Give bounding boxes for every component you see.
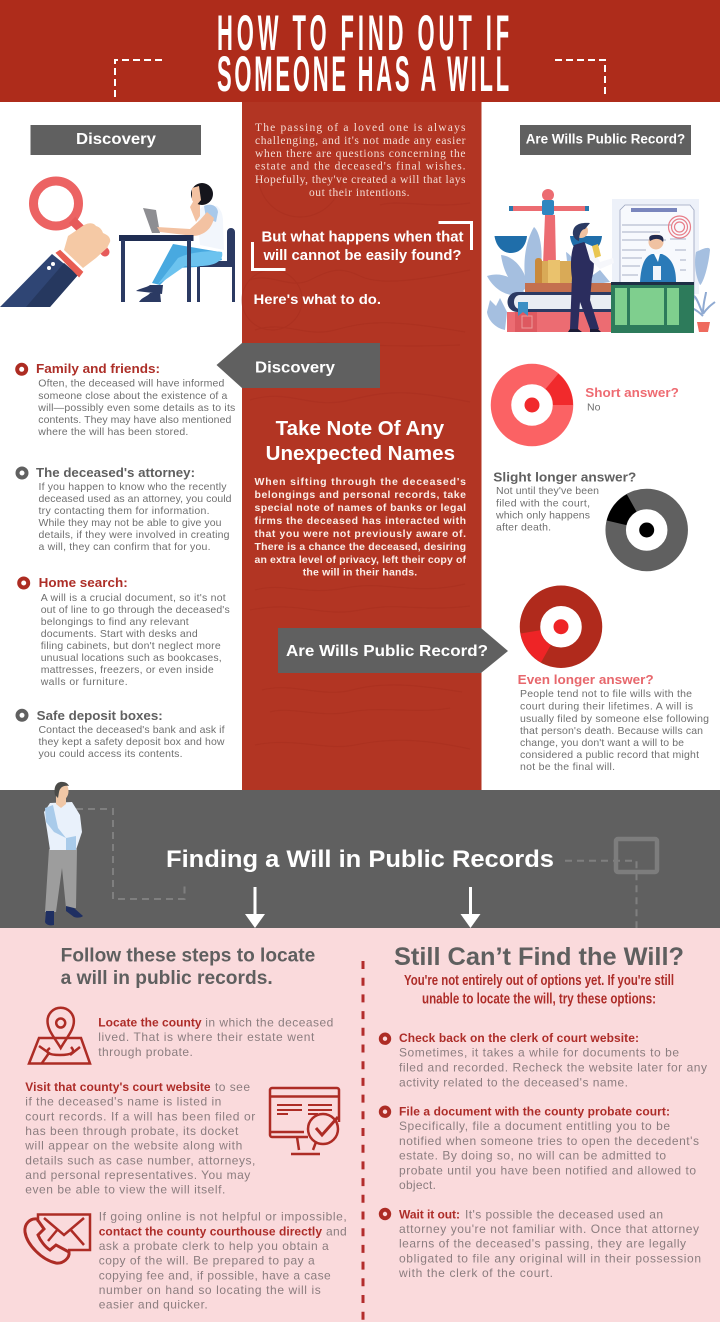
item: home search: Home search: xyxy=(39,575,128,590)
text: contact courthouse: number on hand so locating the will is xyxy=(99,1283,321,1297)
text: contact courthouse xyxy=(99,1210,347,1312)
short answer text: No xyxy=(587,402,601,414)
item: check back: activity related to the deceased's name. xyxy=(399,1075,628,1089)
text: visit county website: and personal representatives. You may xyxy=(25,1168,250,1182)
short answer text: Short answer? xyxy=(585,385,679,400)
item: wait it out: obligated to file any original will in their possession xyxy=(399,1251,701,1265)
slight longer answer text: which only happens xyxy=(495,510,590,522)
even longer answer text: not be the final will. xyxy=(520,761,615,773)
item: family and friends: Family and friends: xyxy=(36,361,160,376)
text: visit county website: details such as case number, attorneys, xyxy=(25,1153,255,1167)
item: attorney: details, if they were involved in creating xyxy=(38,529,230,541)
intro text: when there are questions concerning the xyxy=(255,148,466,160)
item: family and friends: will—possibly even some details as to its xyxy=(37,402,235,414)
item: home search: A will is a crucial document, so it's not xyxy=(41,592,226,604)
text block: take note: special note of names of banks or legal xyxy=(254,502,466,514)
item: home search: mattresses, freezers, or even inside xyxy=(41,664,214,676)
intro text: The passing of a loved one is always xyxy=(255,122,466,134)
item: safe deposit boxes xyxy=(18,708,225,760)
item: wait it out: with the clerk of the court. xyxy=(398,1266,553,1280)
item: attorney: The deceased's attorney: xyxy=(36,465,195,480)
label: are wills public record top xyxy=(520,125,691,155)
item: safe deposit boxes: you could access its contents. xyxy=(38,748,182,760)
item: family and friends: Often, the deceased will have informed xyxy=(38,378,224,390)
even longer answer text: usually filed by someone else following xyxy=(520,713,709,725)
item: home search: unusual locations such as bookcases, xyxy=(41,652,222,664)
text: contact courthouse: If going online is not helpful or impossible, xyxy=(99,1210,347,1224)
item: wait it out: It's possible the deceased used an xyxy=(465,1207,663,1221)
panel: title banner xyxy=(0,0,720,103)
text block: take note: When sifting through the deceased's xyxy=(254,476,466,488)
even longer answer text: considered a public record that might xyxy=(520,749,699,761)
dashed connector right xyxy=(565,861,636,928)
label: discovery top: Discovery xyxy=(76,131,156,148)
even longer answer text: People tend not to file wills with the xyxy=(520,688,692,700)
title: SOMEONE HAS A WILL xyxy=(217,47,509,103)
item: home search: documents. Start with desks and xyxy=(41,628,198,640)
item: home search xyxy=(19,575,230,688)
dashed corner right xyxy=(555,60,605,97)
item: family and friends xyxy=(17,361,235,438)
item: home search: belongings to find any relevant xyxy=(41,616,189,628)
illustration: legal scene xyxy=(487,189,715,333)
panel: finding a will band xyxy=(0,782,720,928)
text: locate the county: Locate the county xyxy=(98,1016,202,1030)
intro text: estate and the deceased's final wishes. xyxy=(255,160,466,172)
heading: take note: Unexpected Names xyxy=(266,443,455,465)
text: visit county website: will appear on the website along with xyxy=(24,1139,242,1153)
text: contact courthouse: contact the county courthouse directly xyxy=(99,1224,322,1238)
item: family and friends: someone close about the existence of a xyxy=(38,390,227,402)
item: wait it out: learns of the deceased's passing, they are legally xyxy=(399,1237,686,1251)
intro text: challenging, and it's not made any easier xyxy=(255,135,466,147)
arrow: right xyxy=(460,887,480,928)
subheading: options xyxy=(404,973,674,1007)
item: attorney: deceased used as an attorney, you could xyxy=(38,493,232,505)
item: safe deposit boxes: Safe deposit boxes: xyxy=(37,708,163,723)
heading: follow these steps: a will in public records. xyxy=(61,968,273,989)
item: attorney: While they may not be able to give you xyxy=(38,517,222,529)
title xyxy=(217,6,509,103)
callout: but what happens: will cannot be easily found? xyxy=(263,247,462,264)
even longer answer text: Even longer answer? xyxy=(518,672,654,687)
slight longer answer text: filed with the court, xyxy=(496,498,590,510)
heading: here's what to do: Here's what to do. xyxy=(254,292,381,307)
arrow label: discovery: Discovery xyxy=(255,360,335,377)
donut chart: short answer xyxy=(501,374,573,436)
even longer answer text: that person's death. Because wills can xyxy=(520,725,703,737)
item: home search: walls or furniture. xyxy=(40,676,128,688)
item: attorney: try contacting them for information. xyxy=(38,505,210,517)
text: locate the county: lived. That is where their estate went xyxy=(98,1030,315,1044)
panel: public record answers xyxy=(493,374,709,773)
text: locate the county: in which the deceased xyxy=(205,1016,333,1030)
arrow: left xyxy=(245,887,265,928)
text block: take note: There is a chance the deceased, desiring xyxy=(254,541,466,553)
short answer text xyxy=(585,385,679,414)
intro text: out their intentions. xyxy=(309,187,410,199)
callout: but what happens xyxy=(252,222,472,270)
text: contact courthouse: and xyxy=(326,1224,347,1238)
heading: still can't find the will: Still Can’t Find the Will? xyxy=(394,943,684,971)
text: visit county website: to see xyxy=(215,1080,250,1094)
item: home search: filing cabinets, but don't neglect more xyxy=(41,640,221,652)
item: family and friends: where the will has been stored. xyxy=(37,426,188,438)
text: visit county website: has been through probate, its docket xyxy=(25,1124,239,1138)
item: check back xyxy=(381,1031,707,1089)
even longer answer text xyxy=(518,672,709,773)
text: visit county website xyxy=(24,1080,255,1197)
arrow label: are wills public record xyxy=(278,628,508,673)
item: wait it out: attorney you're not familiar with. Once that attorney xyxy=(399,1222,699,1236)
slight longer answer text: Not until they've been xyxy=(496,485,599,497)
heading: finding a will: Finding a Will in Public Records xyxy=(166,846,554,873)
item: attorney xyxy=(18,465,232,553)
text: visit county website: Visit that county's court website xyxy=(25,1080,211,1094)
icon: monitor with check xyxy=(270,1088,339,1154)
illustration: standing man xyxy=(44,782,83,925)
item: family and friends: contents. They may have also mentioned xyxy=(38,414,231,426)
text block: take note xyxy=(254,476,466,579)
item: file a document: estate. By doing so, no will can be admitted to xyxy=(399,1149,666,1163)
text block: take note: the will in their hands. xyxy=(303,567,417,579)
text: visit county website: even be able to view the will itself. xyxy=(25,1183,225,1197)
text: contact courthouse: copy of the will. Be prepared to pay a xyxy=(99,1254,315,1268)
item: safe deposit boxes: Contact the deceased's bank and ask if xyxy=(38,724,225,736)
dashed connector left xyxy=(76,809,184,899)
item: check back: Sometimes, it takes a while for documents to be xyxy=(399,1046,679,1060)
intro text: Hopefully, they've created a will that lays xyxy=(255,174,466,186)
icon: map pin xyxy=(29,1008,90,1064)
illustration: hand with magnifying glass xyxy=(0,181,110,307)
text block: take note: an extra level of privacy, left their copy of xyxy=(254,554,466,566)
panel: centre column xyxy=(242,102,482,790)
label: are wills public record top: Are Wills Public Record? xyxy=(526,132,685,146)
label: discovery top xyxy=(30,125,201,155)
item: check back: filed and recorded. Recheck the website later for any xyxy=(399,1061,707,1075)
panel: pink section xyxy=(0,928,720,1322)
illustration: woman at desk xyxy=(119,183,235,302)
donut chart: slight longer answer xyxy=(607,494,678,561)
heading: take note xyxy=(266,418,455,465)
arrow label: are wills public record: Are Wills Public Record? xyxy=(286,643,488,660)
subheading: options: unable to locate the will, try these options: xyxy=(422,991,656,1007)
item: safe deposit boxes: they kept a safety deposit box and how xyxy=(38,736,225,748)
heading: follow these steps xyxy=(61,946,315,989)
item: file a document: object. xyxy=(399,1178,436,1192)
heading: take note: Take Note Of Any xyxy=(276,418,445,440)
item: file a document: Specifically, file a document entitling you to be xyxy=(399,1119,670,1133)
item: check back: Check back on the clerk of court website: xyxy=(399,1031,639,1045)
text block: take note: firms the deceased has interacted with xyxy=(254,515,466,527)
text: visit county website: if the deceased's name is listed in xyxy=(25,1095,221,1109)
item: wait it out: Wait it out: xyxy=(399,1207,460,1221)
icon: square outline xyxy=(616,839,657,872)
title: HOW TO FIND OUT IF xyxy=(217,6,509,62)
item: file a document: notified when someone tries to open the decedent's xyxy=(399,1134,699,1148)
text block: take note: that you were not previously aware of. xyxy=(254,528,466,540)
slight longer answer text: after death. xyxy=(496,522,551,534)
item: file a document xyxy=(381,1104,699,1192)
heading: follow these steps: Follow these steps to locate xyxy=(61,946,315,967)
list: discovery methods xyxy=(17,361,235,760)
slight longer answer text: Slight longer answer? xyxy=(493,470,636,485)
dashed corner left xyxy=(115,60,165,97)
dashed divider xyxy=(362,961,364,1322)
text: contact courthouse: copying fee and, if possible, have a case xyxy=(99,1268,331,1282)
text block: take note: belongings and personal records, take xyxy=(254,489,466,501)
item: home search: out of line to go through the deceased's xyxy=(41,604,230,616)
even longer answer text: court during their lifetimes. A will is xyxy=(520,701,693,713)
intro text xyxy=(255,122,466,199)
slight longer answer text xyxy=(493,470,636,534)
even longer answer text: change, you don't want a will to be xyxy=(520,737,684,749)
item: file a document: probate until you have been notified and allowed to xyxy=(399,1163,696,1177)
text: contact courthouse: ask a probate clerk to help you obtain a xyxy=(99,1239,329,1253)
arrow label: discovery xyxy=(216,343,380,388)
callout: but what happens: But what happens when that xyxy=(262,228,464,246)
text: locate the county xyxy=(98,1016,333,1059)
item: attorney: a will, they can confirm that for you. xyxy=(38,541,210,553)
text: locate the county: through probate. xyxy=(98,1045,193,1059)
item: attorney: If you happen to know who the recently xyxy=(38,481,227,493)
text: contact courthouse: easier and quicker. xyxy=(99,1298,208,1312)
icon: phone and envelope xyxy=(25,1214,90,1263)
donut chart: even longer answer xyxy=(521,596,592,662)
item: file a document: File a document with the county probate court: xyxy=(399,1104,670,1118)
item: wait it out xyxy=(381,1207,701,1280)
text: visit county website: court records. If a will has been filed or xyxy=(25,1109,255,1123)
